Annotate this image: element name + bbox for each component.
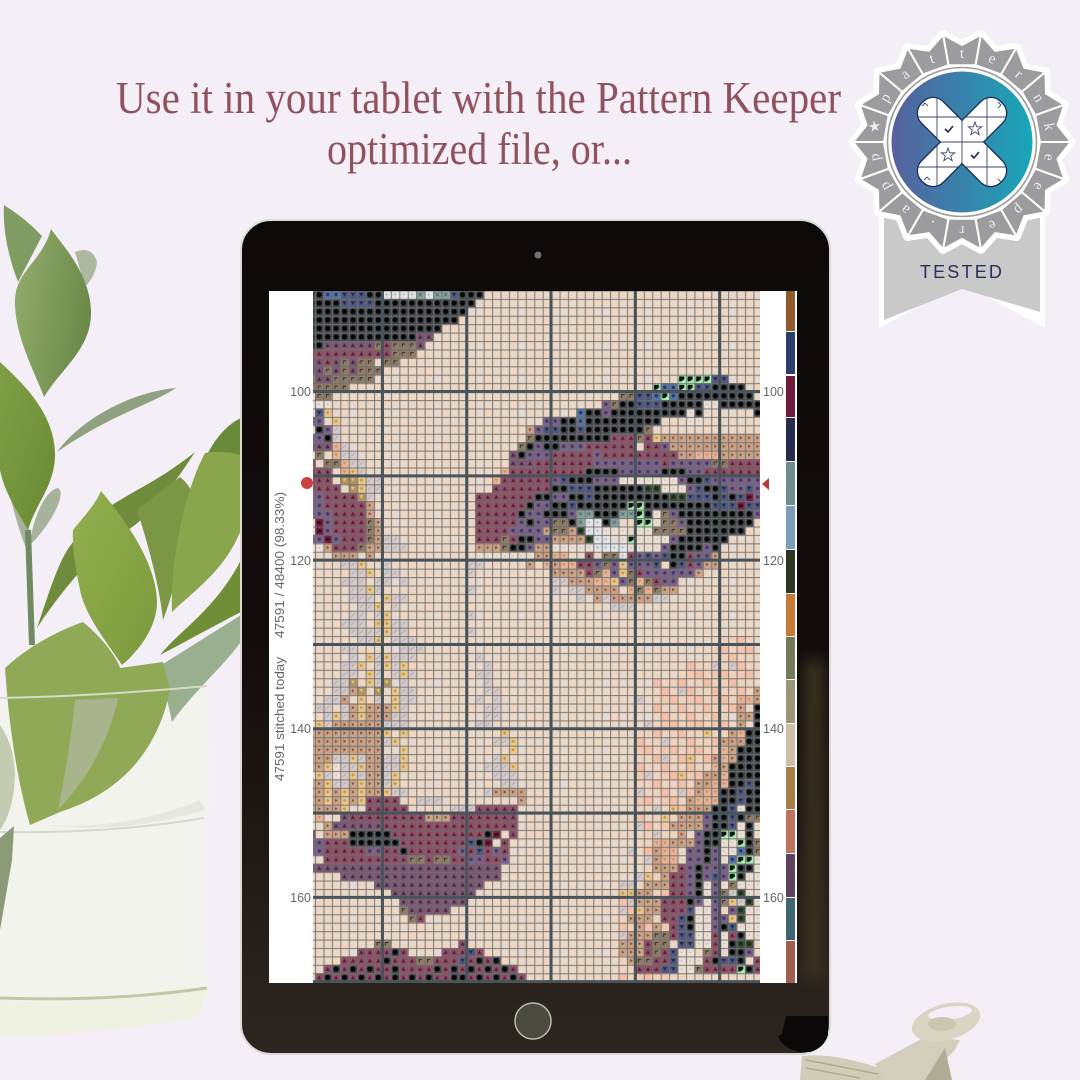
rosette lettering: p [877, 179, 895, 193]
row numbers left [290, 385, 311, 905]
rosette lettering: e [986, 51, 998, 68]
black corner [778, 1016, 828, 1052]
title [116, 73, 841, 174]
gradient seal [892, 72, 1032, 212]
teal stitches [416, 295, 635, 522]
taupe stitches [307, 345, 762, 969]
leaf: bright left [0, 362, 55, 530]
thread palette [786, 291, 795, 983]
rosette lettering: r [1012, 67, 1026, 82]
title: Use it in your tablet with the Pattern Keeper [116, 73, 841, 123]
rosette lettering: t [927, 51, 937, 68]
stem [28, 530, 32, 645]
tan stitches [307, 429, 762, 961]
stitched x icon [916, 96, 1008, 188]
badge: tested [853, 35, 1071, 328]
dark gold stitches [340, 480, 391, 691]
leaf: lower right dark [160, 560, 241, 655]
rotated stats: progress: 47591 / 48400 (98.33%) [273, 492, 287, 638]
leaf: bright right [172, 452, 241, 612]
major grid lines [307, 290, 779, 999]
rosette lettering: a [897, 201, 913, 218]
glass vase [0, 686, 209, 1036]
black stitches [307, 295, 762, 977]
rosette lettering: a [898, 66, 913, 83]
violet stitches [307, 337, 534, 910]
check icons [945, 126, 979, 158]
peach stitches [315, 446, 753, 859]
leaf: back top [4, 205, 42, 282]
rosette lettering: e [986, 216, 998, 233]
binder clip [800, 996, 984, 1080]
rosette lettering: p [867, 152, 884, 162]
leaf: dark upper right [198, 418, 241, 475]
brown side sheen right [805, 660, 823, 980]
rosette lettering: e [1029, 179, 1047, 193]
rosette lettering: r [960, 222, 964, 238]
home button [515, 1003, 551, 1039]
leaf: pale back [75, 250, 97, 287]
dark wine stitches [315, 497, 753, 843]
tested label: TESTED [920, 262, 1004, 282]
cross stitch chart [307, 290, 779, 999]
tablet [241, 220, 830, 1054]
rotated stats: stitched today: 47591 stitched today [273, 656, 287, 781]
submerged stem [0, 826, 14, 930]
wine stitches [307, 345, 762, 977]
plant in glass vase [0, 205, 241, 1036]
rosette lettering [866, 46, 1057, 238]
rosette lettering: p [1011, 201, 1027, 218]
leaf: submerged pale vein [58, 698, 118, 810]
green completed stitches [627, 379, 753, 969]
stitch grid [307, 290, 779, 999]
star icons [941, 122, 982, 161]
navy stitches [315, 295, 762, 969]
leaf: behind right [137, 477, 193, 620]
row numbers right: 160 [763, 891, 784, 905]
ribbon [879, 200, 1045, 328]
glass rim [0, 686, 207, 698]
tablet body [241, 220, 830, 1054]
light stitches [307, 404, 762, 969]
rosette lettering: k [1040, 122, 1057, 132]
dark green stitches [576, 489, 753, 944]
leaf: centre [73, 491, 157, 665]
leaf: dark long [37, 452, 195, 628]
rosette lettering: . [927, 217, 936, 233]
white stitches [382, 295, 627, 556]
leaf: pale lower right [30, 488, 61, 545]
row numbers right: 140 [763, 722, 784, 736]
rosette lettering: t [960, 46, 965, 62]
title: optimized file, or... [327, 124, 632, 174]
blue stitches [323, 295, 745, 859]
row numbers right: 120 [763, 554, 784, 568]
purple stitches [307, 404, 762, 952]
screen [269, 291, 797, 983]
red marker right [762, 478, 769, 490]
leaf: submerged left pale [0, 725, 15, 830]
leaf: pale lower right [163, 615, 241, 722]
row numbers left: 140 [290, 722, 311, 736]
row numbers left: 100 [290, 385, 311, 399]
row numbers right [763, 385, 784, 905]
leaf: large top [15, 229, 91, 397]
row numbers left: 160 [290, 891, 311, 905]
row numbers left: 120 [290, 554, 311, 568]
rosette lettering: p [877, 91, 895, 105]
rosette lettering: n [1029, 91, 1047, 106]
red marker left [301, 477, 313, 489]
rosette lettering: e [1040, 153, 1057, 162]
grey stitches [315, 421, 745, 935]
rosette [853, 35, 1071, 249]
rosette lettering: ★ [866, 119, 884, 135]
gold stitches [315, 413, 736, 918]
leaf: thin side [57, 388, 176, 452]
row numbers right: 100 [763, 385, 784, 399]
camera [534, 252, 542, 258]
leaf: lower big through the glass [5, 622, 170, 825]
leaf: pale lower left [0, 440, 30, 548]
